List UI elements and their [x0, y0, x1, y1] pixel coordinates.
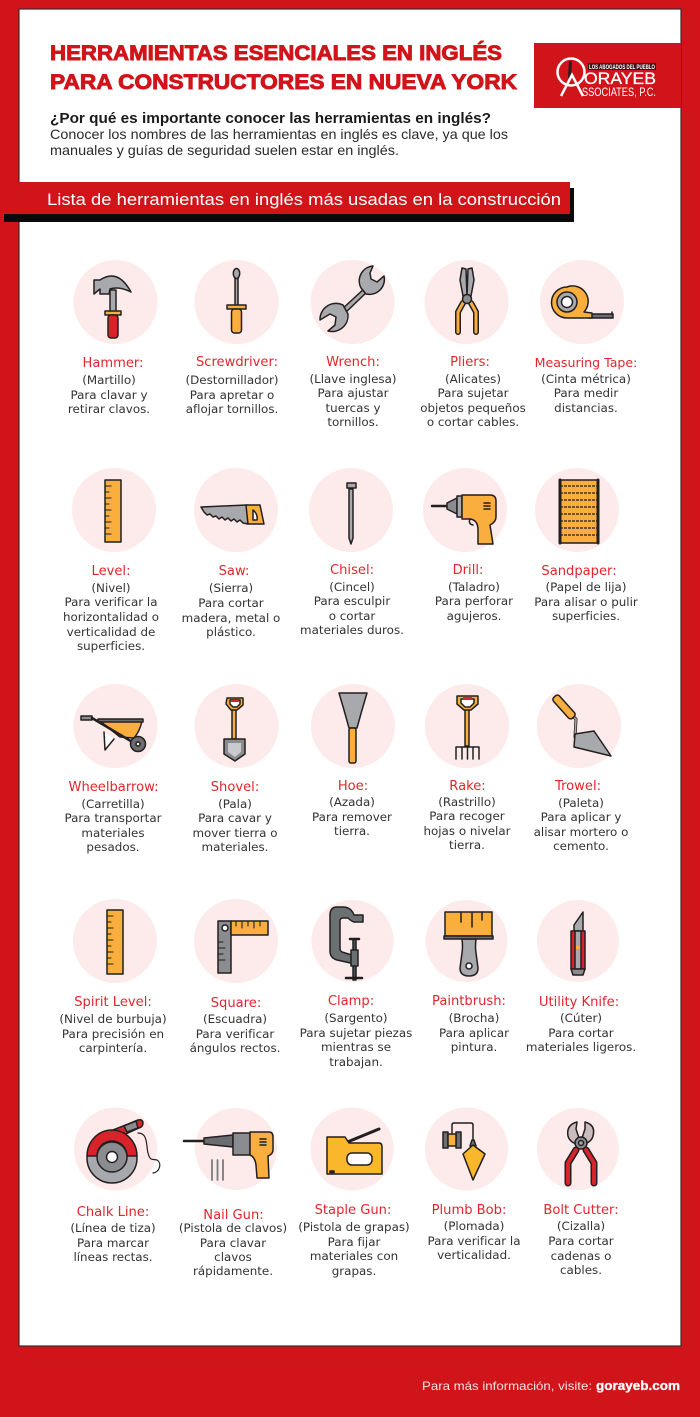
- label: level: Level:: [92, 564, 130, 579]
- label: hoe: Para remover: [312, 810, 392, 824]
- label: trowel: [534, 779, 628, 853]
- label: measuring tape: (Cinta métrica): [541, 372, 631, 386]
- icon: hammer: [94, 276, 131, 338]
- tool: chisel: [300, 468, 404, 637]
- label: pliers: Pliers:: [450, 355, 490, 370]
- logo: LOS ABOGADOS DEL PUEBLO: [589, 65, 655, 71]
- label: bolt cutter: (Cizalla): [557, 1219, 605, 1233]
- label: trowel: (Paleta): [558, 796, 604, 810]
- label: measuring tape: [535, 355, 637, 415]
- logo: [534, 43, 681, 108]
- label: rake: Para recoger: [429, 809, 505, 823]
- label: wheelbarrow: pesados.: [86, 840, 140, 854]
- tool: hammer: [68, 260, 158, 416]
- label: chisel: [300, 563, 404, 637]
- label: drill: agujeros.: [447, 609, 501, 623]
- icon: utility knife: [571, 912, 585, 975]
- label: wrench: Wrench:: [326, 355, 380, 370]
- label: trowel: Trowel:: [554, 779, 601, 794]
- icon: drill: [432, 495, 496, 544]
- tool: drill: [423, 468, 513, 623]
- label: pliers: (Alicates): [445, 372, 501, 386]
- label: wheelbarrow: Wheelbarrow:: [68, 780, 158, 795]
- label: spirit level: Para precisión en: [62, 1027, 164, 1041]
- tool: rake: [423, 684, 511, 852]
- tool: staple gun: [298, 1108, 410, 1278]
- label: chalk line: [70, 1205, 156, 1264]
- label: pliers: objetos pequeños: [420, 401, 526, 415]
- intro heading: ¿Por qué es importante conocer las herramientas en inglés?: [50, 111, 491, 127]
- logo: ORAYEB: [584, 69, 656, 88]
- footer: [422, 1379, 680, 1393]
- label: sandpaper: (Papel de lija): [546, 580, 626, 594]
- label: utility knife: materiales ligeros.: [526, 1040, 636, 1054]
- label: hoe: Hoe:: [338, 779, 368, 794]
- label: screwdriver: (Destornillador): [185, 373, 279, 387]
- label: drill: [435, 563, 513, 623]
- label: level: superficies.: [77, 639, 145, 653]
- tool: clamp: [300, 900, 412, 1069]
- label: square: Square:: [211, 996, 261, 1011]
- label: wrench: [309, 355, 397, 429]
- tool: measuring tape: [535, 260, 637, 415]
- tool: utility knife: [526, 900, 636, 1054]
- label: saw: Saw:: [219, 564, 249, 579]
- label: screwdriver: Screwdriver:: [196, 355, 278, 370]
- label: staple gun: Para fijar: [328, 1235, 381, 1249]
- icon: spirit level: [107, 910, 123, 974]
- label: trowel: alisar mortero o: [534, 825, 628, 839]
- label: wheelbarrow: (Carretilla): [81, 797, 145, 811]
- label: clamp: Clamp:: [328, 994, 374, 1009]
- label: nail gun: clavos: [214, 1250, 252, 1264]
- label: spirit level: Spirit Level:: [74, 995, 152, 1010]
- tool: pliers: [420, 260, 526, 429]
- label: hammer: [68, 356, 150, 416]
- label: nail gun: (Pistola de clavos): [179, 1221, 287, 1235]
- label: level: horizontalidad o: [63, 610, 159, 624]
- icon: paintbrush: [444, 912, 493, 976]
- tool: wheelbarrow: [64, 684, 162, 854]
- label: shovel: [192, 780, 278, 854]
- label: chalk line: Chalk Line:: [77, 1205, 149, 1220]
- label: nail gun: Nail Gun:: [203, 1208, 264, 1223]
- tool: screwdriver: [185, 260, 279, 416]
- label: chisel: Para esculpir: [314, 594, 390, 608]
- icon: screwdriver: [227, 268, 246, 333]
- label: hammer: Para clavar y: [70, 388, 148, 402]
- tool: trowel: [534, 684, 628, 853]
- label: nail gun: [179, 1208, 287, 1278]
- label: screwdriver: [185, 355, 279, 416]
- label: pliers: [420, 355, 526, 429]
- icon: measuring tape: [551, 286, 613, 318]
- label: pliers: o cortar cables.: [427, 415, 519, 429]
- label: square: ángulos rectos.: [190, 1041, 280, 1055]
- tool: shovel: [192, 684, 278, 854]
- label: chisel: (Cincel): [329, 580, 375, 594]
- label: trowel: Para aplicar y: [541, 810, 621, 824]
- label: rake: Rake:: [449, 779, 486, 794]
- label: shovel: (Pala): [218, 797, 252, 811]
- label: hammer: retirar clavos.: [68, 402, 150, 416]
- label: staple gun: grapas.: [332, 1264, 376, 1278]
- label: clamp: (Sargento): [324, 1011, 388, 1025]
- icon: square: [218, 921, 268, 973]
- icon: nail gun: [184, 1132, 273, 1180]
- intro paragraph: Conocer los nombres de las herramientas en inglés es clave, ya que los: [50, 126, 508, 142]
- label: shovel: mover tierra o: [192, 826, 278, 840]
- label: hammer: (Martillo): [82, 373, 136, 387]
- label: utility knife: Utility Knife:: [539, 995, 619, 1010]
- tool: plumb bob: [425, 1108, 520, 1262]
- tool: spirit level: [59, 899, 167, 1055]
- label: clamp: trabajan.: [329, 1055, 383, 1069]
- label: level: (Nivel): [91, 581, 131, 595]
- label: shovel: Para cavar y: [198, 811, 272, 825]
- label: screwdriver: aflojar tornillos.: [186, 402, 278, 416]
- label: utility knife: Para cortar: [548, 1026, 614, 1040]
- tool: nail gun: [179, 1108, 287, 1278]
- label: chalk line: (Línea de tiza): [70, 1221, 156, 1235]
- label: sandpaper: superficies.: [552, 609, 620, 623]
- label: square: Para verificar: [196, 1027, 274, 1041]
- label: staple gun: Staple Gun:: [315, 1203, 391, 1218]
- label: hoe: tierra.: [334, 824, 370, 838]
- label: wrench: (Llave inglesa): [309, 372, 397, 386]
- label: saw: Para cortar: [198, 596, 264, 610]
- tool: sandpaper: [534, 468, 638, 623]
- title: [50, 42, 517, 94]
- label: drill: Para perforar: [435, 594, 513, 608]
- label: wrench: Para ajustar: [317, 386, 389, 400]
- icon: chisel: [347, 483, 356, 544]
- tool: paintbrush: [426, 900, 509, 1054]
- label: paintbrush: Paintbrush:: [432, 994, 506, 1009]
- label: hoe: (Azada): [329, 795, 375, 809]
- label: sandpaper: Para alisar o pulir: [534, 595, 638, 609]
- label: paintbrush: [432, 994, 509, 1054]
- tool: saw: [182, 468, 280, 639]
- label: plumb bob: Para verificar la: [428, 1234, 520, 1248]
- icon: plumb bob: [443, 1123, 485, 1180]
- label: level: Para verificar la: [64, 595, 158, 609]
- label: clamp: Para sujetar piezas: [300, 1026, 412, 1040]
- label: staple gun: [298, 1203, 410, 1278]
- label: bolt cutter: cadenas o: [551, 1249, 611, 1263]
- label: saw: plástico.: [206, 625, 256, 639]
- label: sandpaper: [534, 564, 638, 623]
- label: paintbrush: pintura.: [451, 1040, 497, 1054]
- label: bolt cutter: Bolt Cutter:: [543, 1203, 619, 1218]
- label: spirit level: [59, 995, 167, 1055]
- label: drill: (Taladro): [448, 580, 500, 594]
- footer: Para más información, visite:: [422, 1379, 592, 1393]
- label: saw: madera, metal o: [182, 611, 280, 625]
- label: chisel: Chisel:: [330, 563, 374, 578]
- label: wheelbarrow: Para transportar: [64, 811, 162, 825]
- tool: wrench: [309, 260, 397, 429]
- icon: chalk line: [87, 1120, 160, 1183]
- label: bolt cutter: [543, 1203, 619, 1277]
- label: utility knife: [526, 995, 636, 1054]
- label: rake: (Rastrillo): [438, 795, 496, 809]
- logo: SSOCIATES, P.C.: [582, 87, 656, 99]
- icon: rake: [456, 696, 479, 759]
- tool: square: [190, 899, 280, 1055]
- label: staple gun: (Pistola de grapas): [298, 1220, 410, 1234]
- label: pliers: Para sujetar: [437, 386, 509, 400]
- label: hoe: [312, 779, 392, 838]
- icon: shovel: [224, 698, 245, 761]
- label: hammer: Hammer:: [82, 356, 144, 371]
- label: bolt cutter: Para cortar: [548, 1234, 614, 1248]
- label: screwdriver: Para apretar o: [190, 388, 274, 402]
- label: square: [190, 996, 280, 1055]
- icon: pliers: [458, 268, 476, 332]
- label: chalk line: Para marcar: [77, 1236, 149, 1250]
- tool: chalk line: [70, 1108, 160, 1264]
- icon: trowel: [552, 694, 611, 756]
- label: spirit level: (Nivel de burbuja): [59, 1012, 167, 1026]
- label: chisel: materiales duros.: [300, 623, 404, 637]
- label: rake: hojas o nivelar: [423, 824, 511, 838]
- label: nail gun: rápidamente.: [193, 1264, 273, 1278]
- label: trowel: cemento.: [553, 839, 609, 853]
- label: chalk line: líneas rectas.: [73, 1250, 153, 1264]
- label: paintbrush: Para aplicar: [439, 1026, 509, 1040]
- label: square: (Escuadra): [203, 1012, 267, 1026]
- label: wrench: tornillos.: [327, 415, 379, 429]
- label: measuring tape: Para medir: [554, 386, 618, 400]
- title: HERRAMIENTAS ESENCIALES EN INGLÉS: [50, 42, 502, 65]
- icon: wrench: [320, 266, 384, 332]
- label: nail gun: Para clavar: [200, 1236, 266, 1250]
- intro paragraph: manuales y guías de seguridad suelen estar en inglés.: [50, 142, 399, 158]
- icon: saw: [201, 505, 264, 524]
- icon: hoe: [339, 693, 367, 763]
- label: clamp: mientras se: [321, 1040, 391, 1054]
- label: plumb bob: (Plomada): [444, 1219, 504, 1233]
- intro paragraph: [50, 126, 508, 158]
- label: wheelbarrow: materiales: [81, 826, 145, 840]
- tool: bolt cutter: [537, 1108, 619, 1277]
- label: rake: tierra.: [449, 838, 485, 852]
- label: wrench: tuercas y: [326, 401, 380, 415]
- footer: gorayeb.com: [596, 1379, 680, 1393]
- label: shovel: materiales.: [202, 840, 268, 854]
- label: rake: [423, 779, 511, 852]
- label: drill: Drill:: [453, 563, 483, 578]
- label: shovel: Shovel:: [211, 780, 259, 795]
- label: measuring tape: Measuring Tape:: [535, 355, 637, 370]
- icon: clamp: [330, 907, 363, 980]
- label: paintbrush: (Brocha): [449, 1011, 499, 1025]
- icon: wheelbarrow: [81, 716, 146, 752]
- label: chisel: o cortar: [329, 609, 375, 623]
- label: plumb bob: verticalidad.: [437, 1248, 511, 1262]
- label: plumb bob: Plumb Bob:: [432, 1203, 506, 1218]
- label: saw: (Sierra): [209, 581, 253, 595]
- tool: level: [63, 468, 159, 653]
- tool: hoe: [311, 684, 395, 838]
- icon: bolt cutter: [568, 1122, 594, 1183]
- label: measuring tape: distancias.: [554, 401, 618, 415]
- label: wheelbarrow: [64, 780, 162, 854]
- label: level: [63, 564, 159, 653]
- label: utility knife: (Cúter): [560, 1011, 602, 1025]
- label: saw: [182, 564, 280, 639]
- title: PARA CONSTRUCTORES EN NUEVA YORK: [50, 71, 517, 94]
- label: clamp: [300, 994, 412, 1069]
- section banner: [4, 182, 574, 222]
- icon: staple gun: [327, 1129, 382, 1174]
- label: spirit level: carpintería.: [79, 1041, 147, 1055]
- icon: sandpaper: [560, 480, 598, 543]
- section banner: Lista de herramientas en inglés más usadas en la construcción: [47, 190, 561, 209]
- label: bolt cutter: cables.: [560, 1263, 602, 1277]
- label: staple gun: materiales con: [310, 1249, 398, 1263]
- label: level: verticalidad de: [67, 625, 155, 639]
- label: sandpaper: Sandpaper:: [541, 564, 617, 579]
- label: plumb bob: [428, 1203, 520, 1262]
- icon: level: [105, 480, 121, 542]
